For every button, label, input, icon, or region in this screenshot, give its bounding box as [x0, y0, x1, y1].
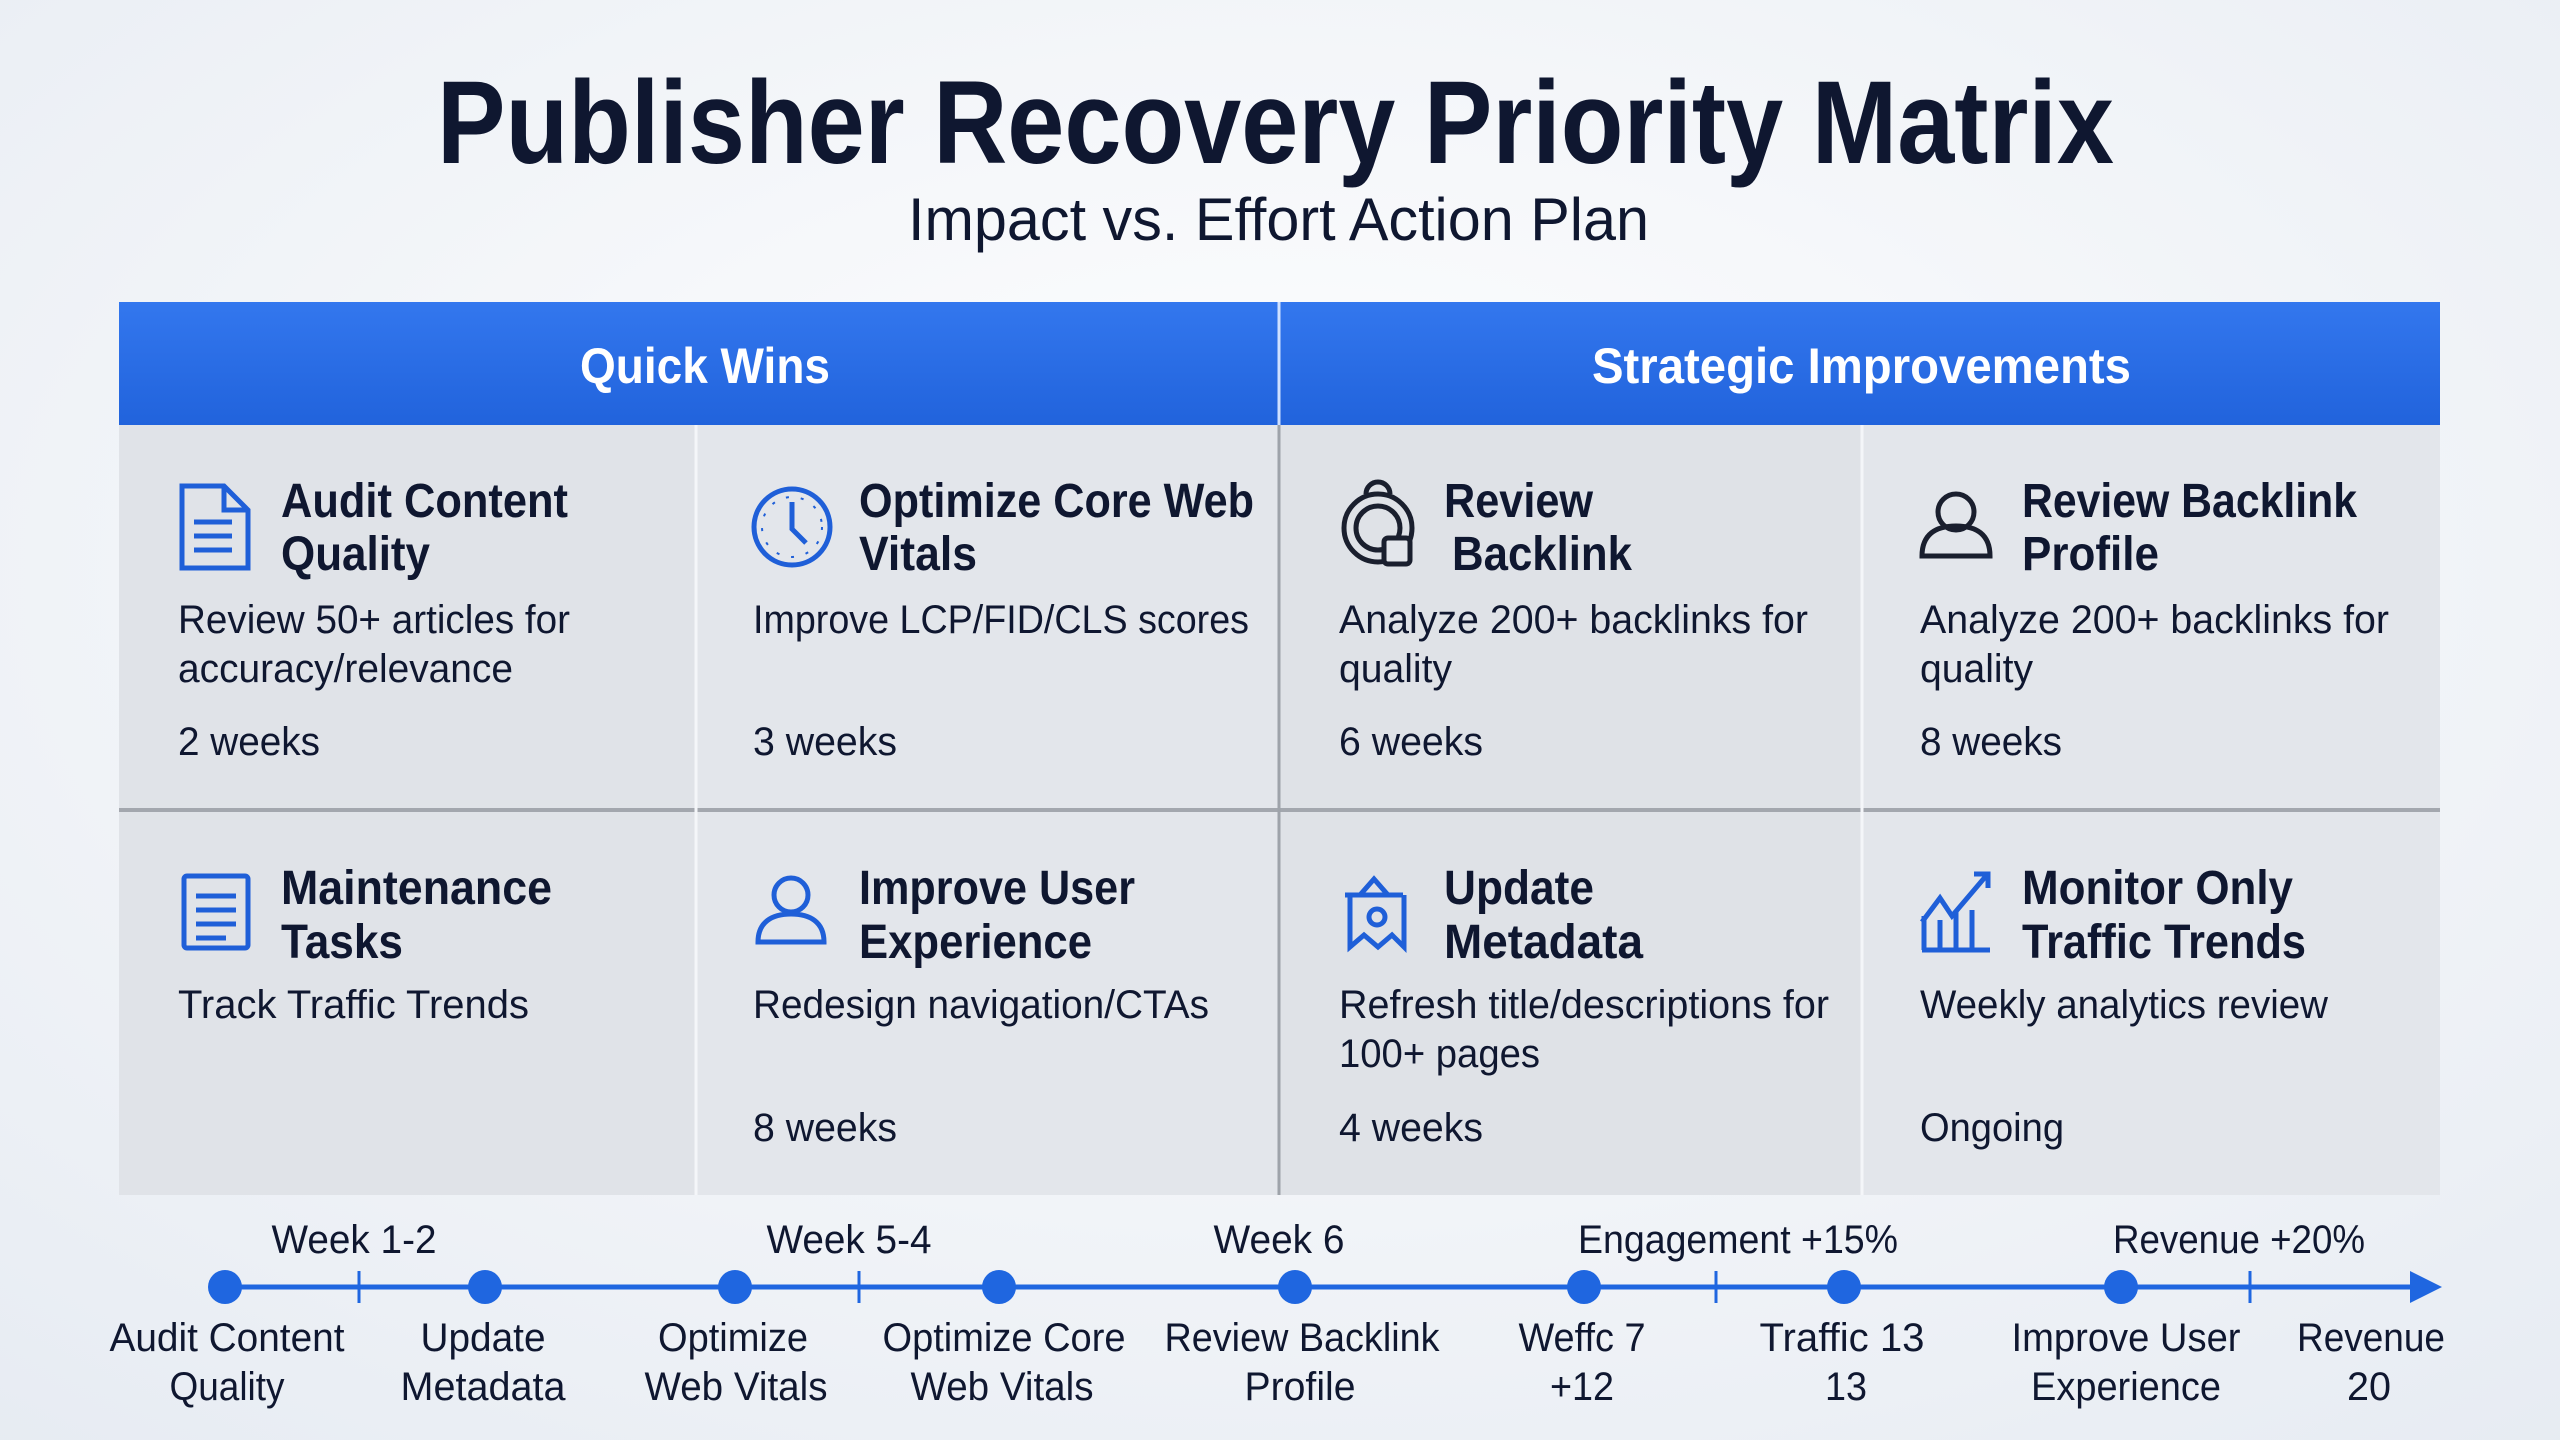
- panel: review backlink: Analyze 200+ backlinks for: [1339, 598, 1808, 642]
- panel: monitor only traffic trends: Monitor Only: [2022, 862, 2293, 915]
- panel: optimize core web vitals: Optimize Core Web: [859, 475, 1254, 528]
- panel: review backlink profile: [1920, 475, 2389, 764]
- icon: list document: [184, 876, 248, 948]
- panel: update metadata: 100+ pages: [1339, 1032, 1540, 1076]
- icon: link lock: [1344, 482, 1412, 564]
- panel: optimize core web vitals: Vitals: [859, 528, 977, 581]
- panel: review backlink: Review: [1444, 475, 1594, 528]
- panel: monitor only traffic trends: Weekly analytics review: [1920, 983, 2328, 1027]
- panel: audit content quality: Review 50+ articles for: [178, 598, 570, 642]
- panel: improve user experience: Redesign navigation/CTAs: [753, 983, 1209, 1027]
- icon: chart trend: [1922, 874, 1990, 950]
- title: Publisher Recovery Priority Matrix: [437, 57, 2114, 189]
- timeline: [110, 1218, 2445, 1409]
- icon: clock: [754, 489, 830, 565]
- panel: review backlink profile: Analyze 200+ backlinks for: [1920, 598, 2389, 642]
- timeline: Profile: [1244, 1365, 1356, 1409]
- panel: review backlink profile: 8 weeks: [1920, 720, 2062, 764]
- timeline: Optimize: [658, 1316, 808, 1360]
- subtitle: Impact vs. Effort Action Plan: [908, 186, 1649, 253]
- panel: maintenance tasks: [178, 862, 552, 1027]
- icon: tag badge: [1345, 879, 1404, 947]
- matrix grid: [119, 425, 2440, 1195]
- timeline: Improve User: [2012, 1316, 2240, 1360]
- timeline: Revenue +20%: [2113, 1218, 2365, 1262]
- panel: maintenance tasks: Maintenance: [281, 862, 552, 915]
- panel: review backlink profile: Profile: [2022, 528, 2159, 581]
- panel: monitor only traffic trends: Ongoing: [1920, 1106, 2064, 1150]
- timeline: Engagement +15%: [1578, 1218, 1898, 1262]
- panel: optimize core web vitals: 3 weeks: [753, 720, 897, 764]
- timeline: Web Vitals: [910, 1365, 1094, 1409]
- timeline: Traffic 13: [1760, 1316, 1924, 1360]
- panel: audit content quality: 2 weeks: [178, 720, 320, 764]
- icon: user: [1922, 494, 1990, 556]
- panel: update metadata: Metadata: [1444, 916, 1643, 969]
- panel: audit content quality: accuracy/relevance: [178, 647, 513, 691]
- panel: review backlink profile: quality: [1920, 647, 2033, 691]
- panel: improve user experience: Improve User: [859, 862, 1135, 915]
- arrow: [2410, 1271, 2442, 1303]
- panel: review backlink: Backlink: [1452, 528, 1632, 581]
- panel: review backlink: [1339, 475, 1808, 764]
- icon: document: [182, 486, 248, 568]
- timeline: Quality: [170, 1365, 284, 1409]
- timeline: Week 6: [1214, 1218, 1344, 1262]
- panel: improve user experience: [753, 862, 1209, 1150]
- timeline: Week 1-2: [272, 1218, 436, 1262]
- panel: review backlink: quality: [1339, 647, 1452, 691]
- header band: [119, 302, 2440, 425]
- timeline: Experience: [2031, 1365, 2221, 1409]
- panel: update metadata: 4 weeks: [1339, 1106, 1483, 1150]
- panel: review backlink profile: Review Backlink: [2022, 475, 2357, 528]
- timeline: Update: [420, 1316, 546, 1360]
- panel: update metadata: [1339, 862, 1829, 1150]
- panel: audit content quality: Audit Content: [281, 475, 568, 528]
- panel: optimize core web vitals: [753, 475, 1254, 764]
- icon: user blue: [758, 878, 824, 942]
- panel: maintenance tasks: Track Traffic Trends: [178, 983, 529, 1027]
- panel: monitor only traffic trends: Traffic Trends: [2022, 916, 2306, 969]
- timeline: Revenue: [2297, 1316, 2445, 1360]
- timeline: Optimize Core: [882, 1316, 1126, 1360]
- panel: audit content quality: [178, 475, 570, 764]
- timeline: Weffc 7: [1518, 1316, 1646, 1360]
- timeline: Week 5-4: [766, 1218, 932, 1262]
- timeline: Review Backlink: [1164, 1316, 1440, 1360]
- panel: improve user experience: Experience: [859, 916, 1092, 969]
- timeline: 20: [2347, 1365, 2391, 1409]
- panel: improve user experience: 8 weeks: [753, 1106, 897, 1150]
- panel: monitor only traffic trends: [1920, 862, 2328, 1150]
- timeline: Audit Content: [110, 1316, 344, 1360]
- panel: update metadata: Refresh title/descriptions for: [1339, 983, 1829, 1027]
- panel: optimize core web vitals: Improve LCP/FID/CLS scores: [753, 598, 1249, 642]
- panel: review backlink: 6 weeks: [1339, 720, 1483, 764]
- timeline: Metadata: [400, 1365, 566, 1409]
- panel: maintenance tasks: Tasks: [281, 916, 403, 969]
- timeline: +12: [1550, 1365, 1614, 1409]
- panel: audit content quality: Quality: [281, 528, 430, 581]
- header: quick wins: Quick Wins: [580, 338, 830, 394]
- timeline: Web Vitals: [644, 1365, 828, 1409]
- header: strategic improvements: Strategic Improvements: [1592, 338, 2131, 394]
- panel: update metadata: Update: [1444, 862, 1594, 915]
- timeline: 13: [1825, 1365, 1867, 1409]
